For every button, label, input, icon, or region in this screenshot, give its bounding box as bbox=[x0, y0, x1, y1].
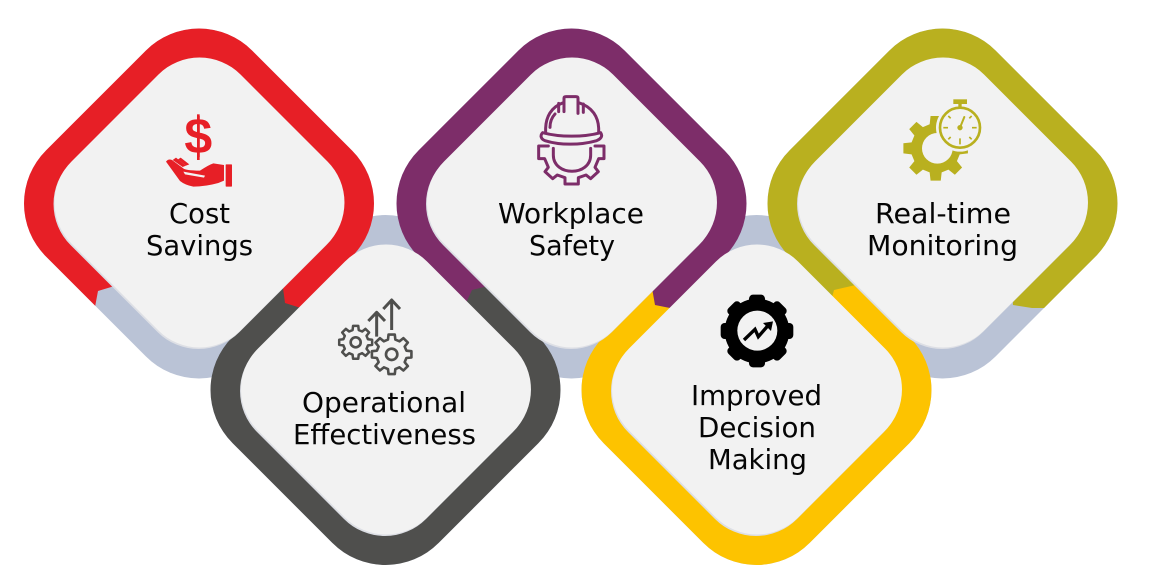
label: Operational bbox=[302, 386, 466, 419]
label bbox=[498, 197, 644, 262]
ring: olive bbox=[768, 28, 1118, 308]
label: Safety bbox=[529, 229, 615, 262]
icon: gear and stopwatch bbox=[903, 99, 984, 181]
panel: operational effectiveness bbox=[216, 221, 555, 560]
label bbox=[146, 197, 253, 262]
panel: workplace safety bbox=[402, 34, 741, 373]
label: Monitoring bbox=[867, 229, 1018, 262]
label: Real-time bbox=[875, 197, 1011, 230]
panel: improved decision making bbox=[587, 221, 926, 560]
ring: dark grey bbox=[210, 286, 560, 565]
label bbox=[691, 379, 822, 476]
label: Effectiveness bbox=[293, 418, 476, 451]
label bbox=[867, 197, 1018, 262]
panel: cost savings bbox=[30, 34, 368, 373]
label: Cost bbox=[169, 197, 230, 230]
icon: dollar in hand bbox=[166, 109, 232, 187]
label: Making bbox=[708, 443, 807, 476]
label: Workplace bbox=[498, 197, 644, 230]
panel: real-time monitoring bbox=[773, 34, 1112, 373]
ring: purple bbox=[396, 28, 746, 308]
label: Savings bbox=[146, 229, 253, 262]
icon: black gear with rising chart bbox=[721, 295, 793, 367]
icon: dollar in hand: $ bbox=[184, 109, 212, 165]
ring: red bbox=[24, 28, 374, 308]
label bbox=[293, 386, 476, 451]
icon: gears and arrows bbox=[339, 300, 411, 374]
icon: helmet and gear bbox=[539, 97, 604, 184]
label: Improved bbox=[691, 379, 822, 412]
label: Decision bbox=[698, 411, 816, 444]
ring: yellow bbox=[582, 285, 932, 565]
